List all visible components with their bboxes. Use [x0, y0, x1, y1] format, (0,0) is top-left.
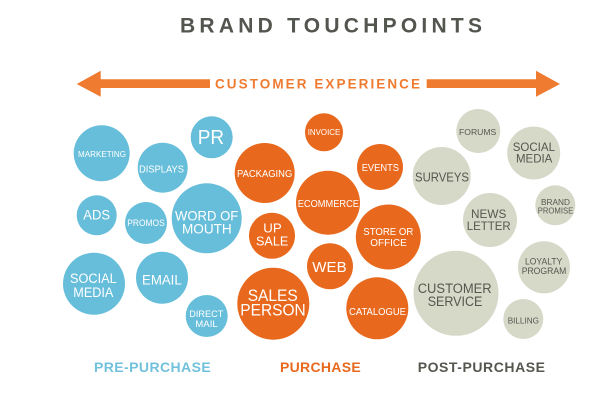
bubble: events: EVENTS — [362, 163, 399, 174]
panel: purchase bubbles — [235, 113, 421, 340]
bubble: up sale: SALE — [256, 233, 289, 248]
bubble: social media: SOCIAL — [70, 271, 117, 286]
bubble: loyalty program — [518, 241, 570, 293]
bubble: displays: DISPLAYS — [139, 164, 184, 175]
bubble: catalogue: CATALOGUE — [349, 307, 406, 318]
bubble: up sale — [249, 213, 295, 259]
bubble: ads: ADS — [83, 207, 110, 222]
bubble: news letter — [463, 193, 517, 247]
bubble: forums — [456, 109, 500, 153]
bubble: ecommerce: ECOMMERCE — [298, 199, 359, 210]
label: post-purchase: POST-PURCHASE — [418, 359, 545, 375]
bubble: social media: MEDIA — [516, 152, 552, 166]
bubble: ads — [77, 195, 117, 235]
bubble: store or office: OFFICE — [370, 238, 407, 249]
bubble: email — [136, 252, 188, 304]
bubble: store or office — [356, 204, 421, 270]
bubble: events — [357, 144, 403, 190]
bubble: direct mail: DIRECT — [189, 309, 224, 319]
bubble: social media — [63, 253, 125, 315]
panel: post-purchase bubbles — [413, 109, 575, 339]
bubble: displays — [138, 143, 188, 193]
bubble: sales person — [237, 268, 309, 340]
bubble: surveys: SURVEYS — [415, 170, 469, 185]
bubble: loyalty program: LOYALTY — [525, 256, 562, 266]
label: purchase: PURCHASE — [280, 359, 361, 375]
panel: pre-purchase bubbles — [63, 116, 242, 337]
bubble: up sale: UP — [263, 220, 282, 235]
bubble: social media — [507, 126, 560, 180]
bubble: store or office: STORE OR — [363, 227, 413, 238]
bubble: brand promise — [535, 185, 575, 225]
bubble: PR — [191, 116, 233, 158]
bubble: web — [307, 243, 353, 289]
bubble: customer service: SERVICE — [428, 294, 482, 309]
bubble: marketing: MARKETING — [78, 149, 126, 159]
bubble: surveys — [413, 147, 471, 205]
bubble: word of mouth — [172, 183, 242, 253]
bubble: promos — [125, 202, 167, 244]
bubble: direct mail — [186, 295, 228, 337]
bubble: news letter: NEWS — [471, 207, 506, 221]
bubble: brand promise: BRAND — [541, 198, 570, 207]
bubble: PR: PR — [198, 126, 224, 149]
bubble: packaging: PACKAGING — [237, 169, 292, 180]
bubble: direct mail: MAIL — [195, 319, 218, 329]
bubble: invoice — [305, 113, 343, 151]
label: pre-purchase: PRE-PURCHASE — [94, 359, 211, 375]
bubble: forums: FORUMS — [459, 127, 497, 137]
bubble: promos: PROMOS — [127, 218, 165, 228]
bubble: web: WEB — [312, 259, 347, 276]
bubble: customer service — [414, 251, 498, 336]
arrow label: CUSTOMER EXPERIENCE — [215, 76, 420, 92]
bubble: customer service: CUSTOMER — [418, 281, 492, 296]
bubble: packaging — [235, 143, 295, 203]
bubble: social media: MEDIA — [73, 285, 113, 300]
bubble: email: EMAIL — [142, 272, 182, 288]
bubble: ecommerce — [296, 171, 360, 235]
bubble: word of mouth: WORD OF — [175, 208, 238, 224]
bubble: billing: BILLING — [508, 316, 539, 326]
bubble: news letter: LETTER — [467, 219, 511, 233]
bubble: brand promise: PROMISE — [538, 206, 574, 216]
bubble: word of mouth: MOUTH — [182, 221, 232, 237]
bubble: marketing — [74, 125, 130, 181]
bubble: billing — [503, 299, 543, 339]
bubble: catalogue — [346, 277, 408, 339]
title: BRAND TOUCHPOINTS — [180, 15, 482, 38]
customer experience arrow — [77, 71, 560, 97]
arrow: left — [77, 71, 210, 97]
bubble: sales person: SALES — [248, 286, 298, 305]
bubble: social media: SOCIAL — [513, 140, 555, 154]
arrow: right — [427, 71, 560, 97]
bubble: sales person: PERSON — [240, 301, 306, 320]
bubble: invoice: INVOICE — [308, 127, 341, 137]
bubble: loyalty program: PROGRAM — [522, 266, 566, 276]
